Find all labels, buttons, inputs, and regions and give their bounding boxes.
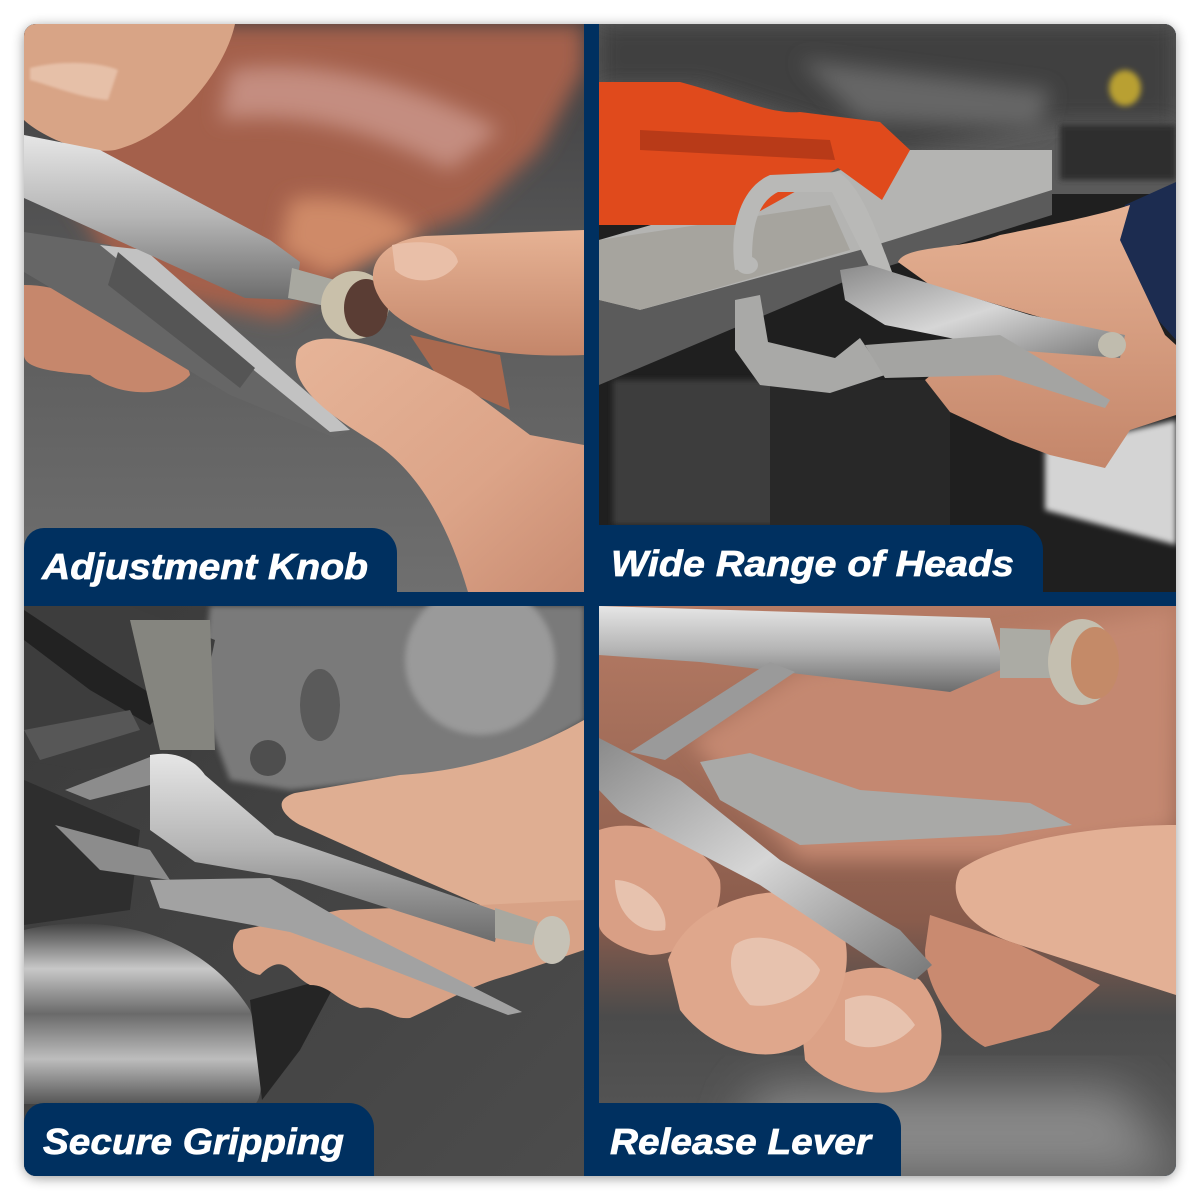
label: Release Lever: Release Lever: [610, 1121, 873, 1162]
panel: secure gripping photo: [24, 585, 584, 1176]
label: Secure Gripping: Secure Gripping: [43, 1121, 344, 1162]
label: Adjustment Knob: Adjustment Knob: [41, 546, 368, 587]
label: Release Lever: [585, 1103, 901, 1176]
label: Adjustment Knob: [24, 528, 397, 592]
panel: wide range of heads photo: [599, 24, 1176, 592]
label: Wide Range of Heads: [585, 525, 1043, 592]
label: Secure Gripping: [24, 1103, 374, 1176]
panel: release lever photo: [599, 606, 1176, 1176]
panel: adjustment knob photo: [24, 24, 584, 592]
label: Wide Range of Heads: Wide Range of Heads: [611, 543, 1014, 584]
